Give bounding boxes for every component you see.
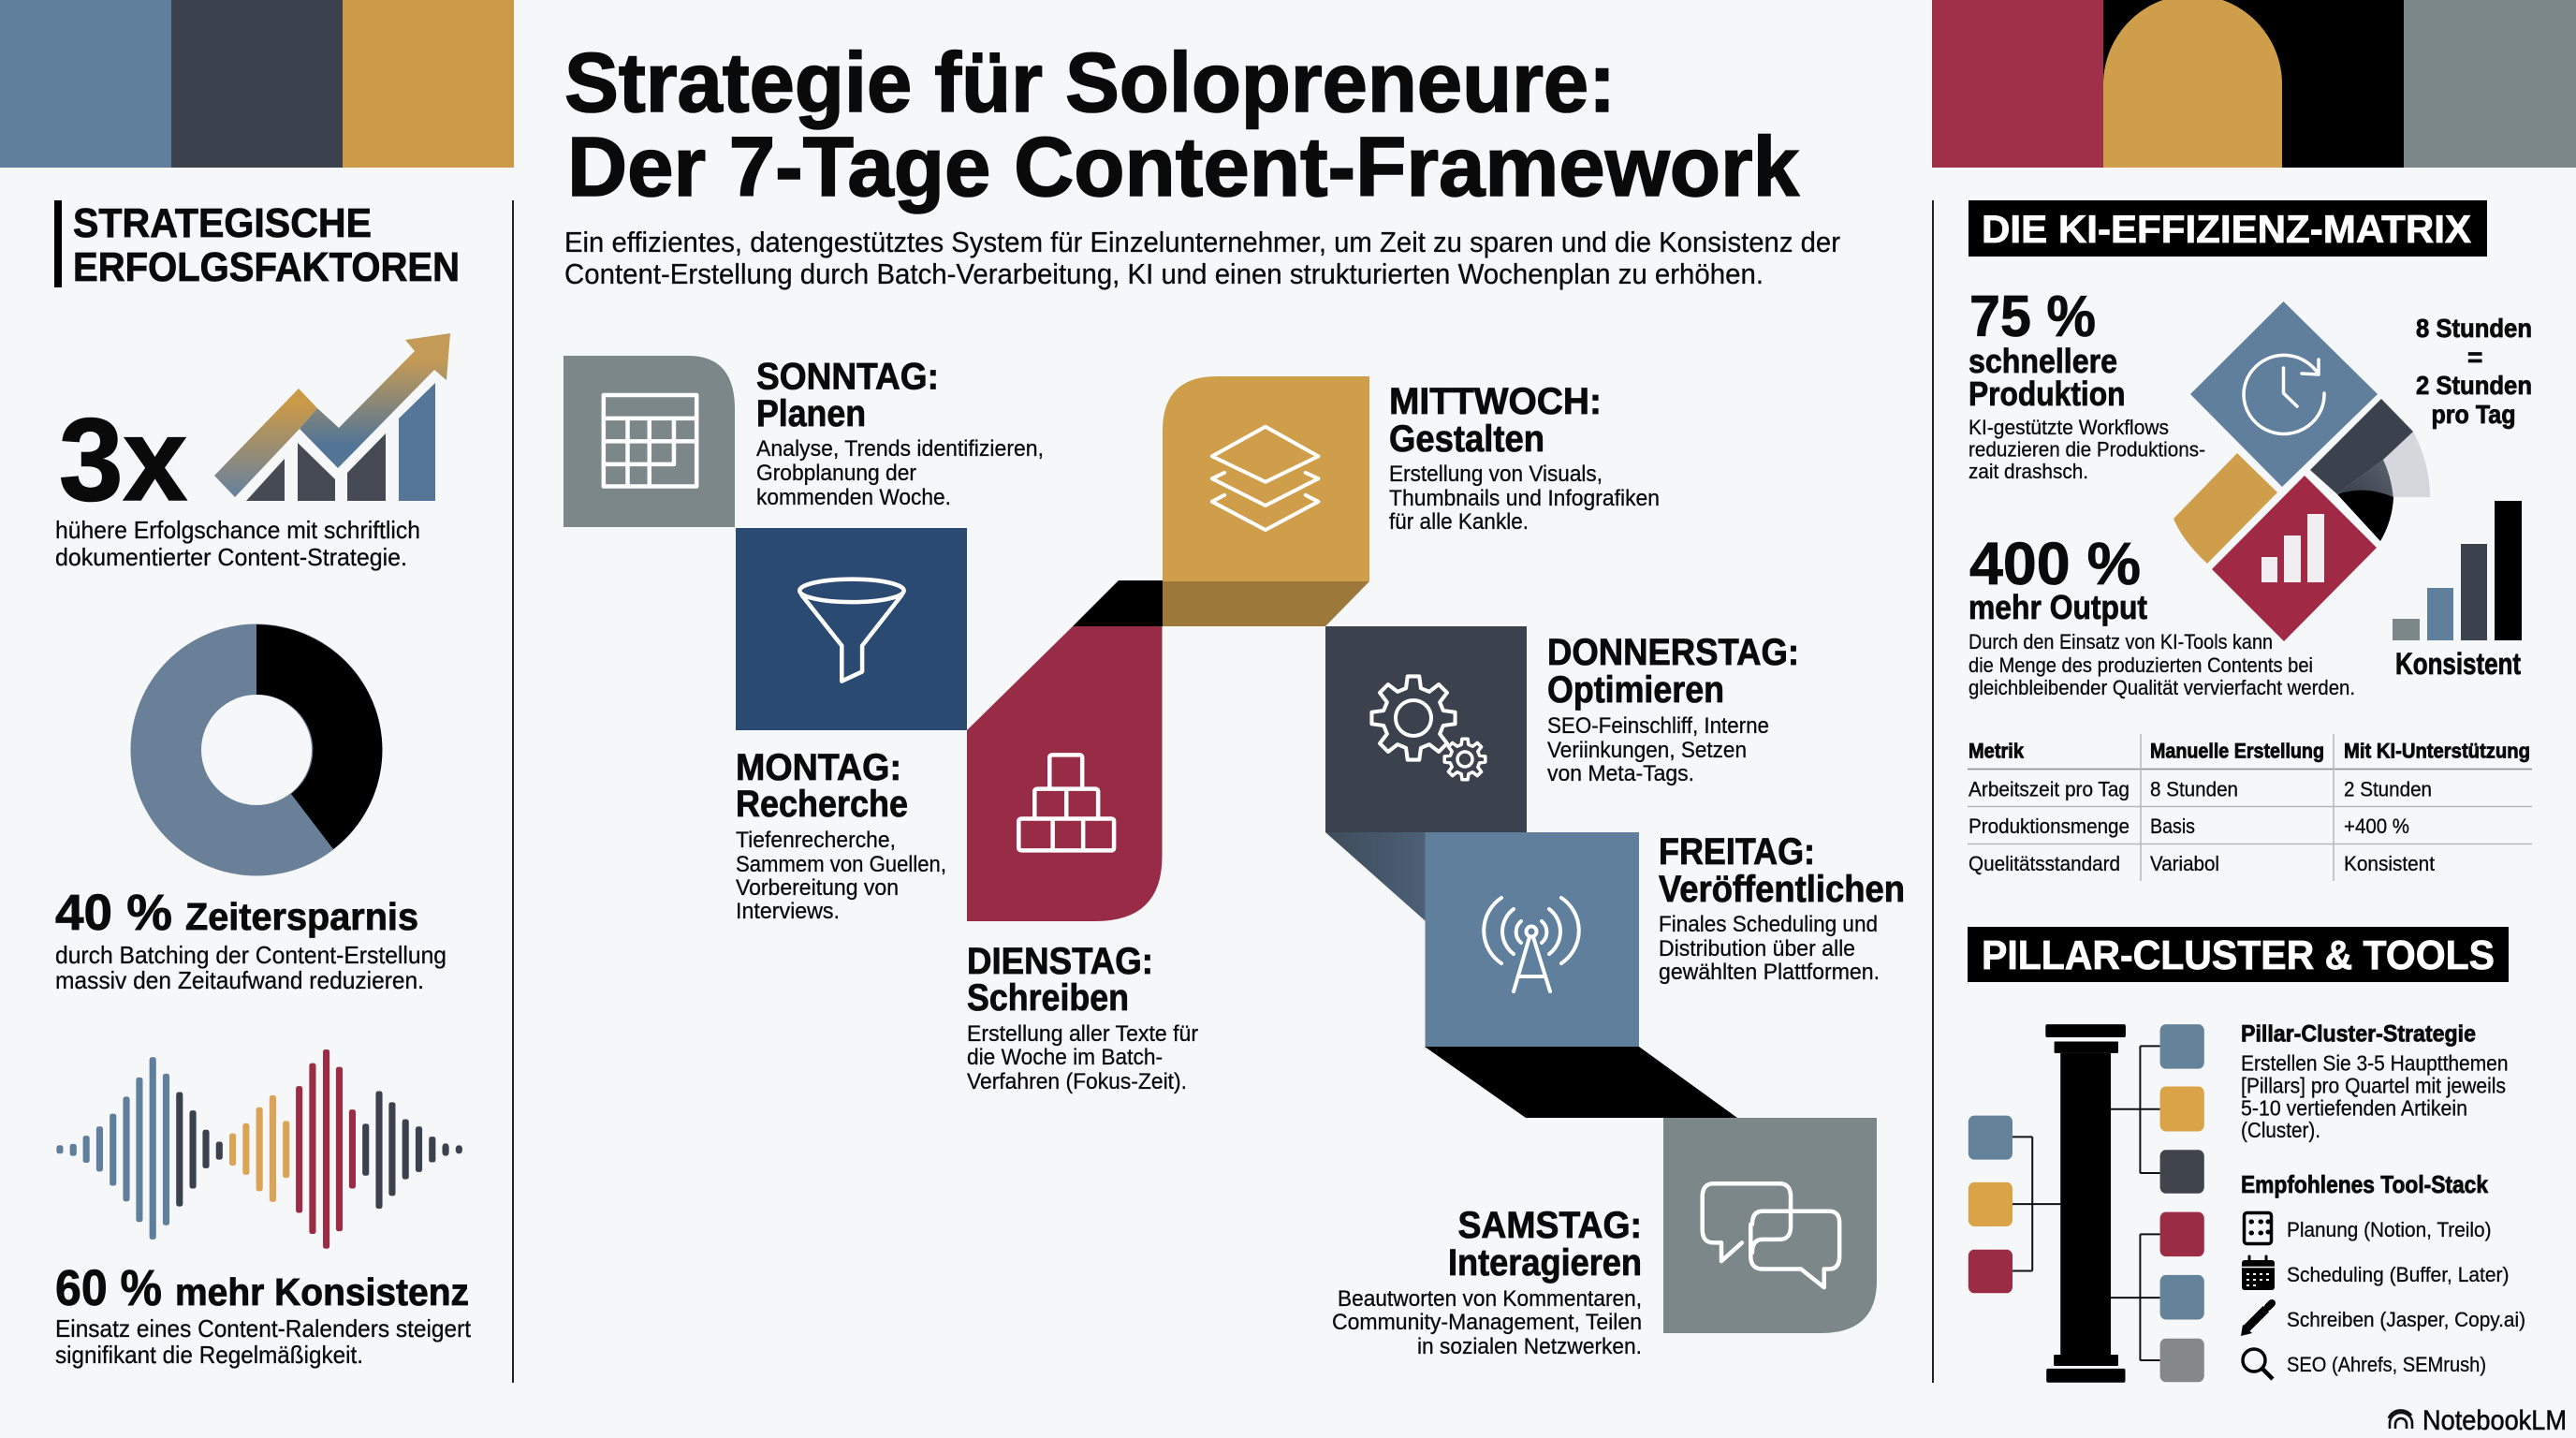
stat: 60 percent consistency: 60 % [55, 1260, 162, 1316]
icon: calendar grid [604, 395, 696, 487]
text: mittwoch [1389, 381, 1660, 535]
stat: 60 percent consistency: mehr Konsistenz [175, 1270, 469, 1313]
text: donnerstag: von Meta-Tags. [1547, 761, 1694, 786]
text: sonntag: Grobplanung der [756, 461, 916, 486]
heading: pillar-cluster & tools: PILLAR-CLUSTER & TOOLS [1982, 932, 2495, 978]
stat: 400 percent: 400 % [1969, 530, 2141, 597]
text: 3x caption [55, 516, 420, 571]
heading: die ki-effizienz-matrix: DIE KI-EFFIZIENZ-MATRIX [1982, 207, 2471, 251]
title: Der 7-Tage Content-Framework [567, 121, 1800, 214]
stat: 400 percent: gleichbleibender Qualität vervierfacht werden. [1969, 676, 2355, 699]
table: comparison: Quelitätsstandard [1969, 852, 2120, 875]
text: dienstag [967, 941, 1198, 1094]
table: comparison: Arbeitszeit pro Tag [1969, 777, 2130, 801]
table: comparison: 2 Stunden [2344, 777, 2432, 801]
chart: waveform [56, 1049, 462, 1249]
text: freitag: Finales Scheduling und [1659, 912, 1878, 937]
stat: 60 percent consistency [55, 1260, 472, 1369]
icon: calendar [2242, 1256, 2275, 1290]
icon: chat bubbles [1703, 1183, 1839, 1287]
table: comparison: Manuelle Erstellung [2150, 740, 2324, 762]
text: donnerstag: DONNERSTAG: [1547, 632, 1799, 673]
stat: 400 percent: Durch den Einsatz von KI-Tools kann [1969, 630, 2273, 653]
heading: strategische erfolgsfaktoren [54, 200, 460, 290]
table: comparison: +400 % [2344, 814, 2409, 838]
stat: 75 percent: KI-gestützte Workflows [1969, 416, 2169, 439]
connector: black band [1073, 580, 1163, 626]
text: pillar-cluster strategy: Pillar-Cluster-Strategie [2241, 1020, 2476, 1047]
text: donnerstag: Veriinkungen, Setzen [1547, 738, 1747, 763]
heading: strategische erfolgsfaktoren: ERFOLGSFAKTOREN [73, 244, 460, 290]
text: 8 hours equals 2 hours: pro Tag [2432, 400, 2516, 429]
table: comparison: 8 Stunden [2150, 777, 2238, 801]
text: pillar-cluster strategy [2241, 1020, 2509, 1142]
text: dienstag: Erstellung aller Texte für [967, 1021, 1198, 1047]
stat: 75 percent: 75 % [1969, 285, 2096, 349]
text: donnerstag [1547, 632, 1799, 786]
text: montag: Sammem von Guellen, [736, 852, 946, 877]
stat: 60 percent consistency: Einsatz eines Content-Ralenders steigert [55, 1314, 472, 1343]
step shape: donnerstag [1325, 626, 1527, 832]
text: pillar-cluster strategy: 5-10 vertiefenden Artikein [2241, 1095, 2467, 1120]
text: seo: SEO (Ahrefs, SEMrush) [2287, 1353, 2486, 1376]
text: samstag [1332, 1205, 1642, 1359]
text: pillar-cluster strategy: Erstellen Sie 3-5 Hauptthemen [2241, 1050, 2509, 1075]
text: mittwoch: Gestalten [1389, 418, 1544, 460]
text: 8 hours equals 2 hours [2416, 314, 2532, 429]
stat: 400 percent: mehr Output [1969, 588, 2147, 626]
text: samstag: SAMSTAG: [1458, 1205, 1642, 1246]
text: 8 hours equals 2 hours: 8 Stunden [2416, 314, 2532, 343]
chart: efficiency diamonds [2174, 301, 2430, 641]
table: comparison: Produktionsmenge [1969, 814, 2130, 838]
chart: ascending bars [2393, 501, 2522, 640]
panel: KI efficiency matrix [1968, 200, 2532, 881]
stat: 40 percent time saving: Zeitersparnis [185, 895, 418, 938]
text: freitag [1659, 831, 1905, 985]
text: montag: Tiefenrecherche, [736, 828, 896, 853]
icon: layers [1212, 427, 1318, 530]
text: planung: Planung (Notion, Treilo) [2287, 1218, 2492, 1241]
text: samstag: Beautworten von Kommentaren, [1338, 1286, 1642, 1312]
text: samstag: Community-Management, Teilen [1332, 1310, 1642, 1335]
text: sonntag: SONNTAG: [756, 356, 939, 397]
stat: 40 percent time saving [55, 885, 446, 994]
stat: 75 percent: schnellere [1969, 342, 2117, 380]
text: dienstag: Verfahren (Fokus-Zeit). [967, 1069, 1187, 1094]
text: 8 hours equals 2 hours: = [2467, 343, 2482, 372]
connector: gold shadow band [1163, 581, 1369, 626]
table: comparison: Mit KI-Unterstützung [2344, 740, 2530, 762]
step shape: sonntag [564, 356, 735, 527]
text: mittwoch: Thumbnails und Infografiken [1389, 486, 1660, 511]
text: sonntag: Planen [756, 393, 866, 434]
stat: 3x: 3x [59, 395, 187, 525]
stat: 400 percent: die Menge des produzierten Contents bei [1969, 653, 2313, 677]
text: dienstag: Schreiben [967, 977, 1129, 1019]
text: montag: Vorbereitung von [736, 875, 899, 901]
stat: 40 percent time saving: 40 % [55, 885, 172, 941]
table: comparison: Basis [2150, 814, 2195, 838]
step shape: samstag [1663, 1118, 1877, 1333]
top left colour blocks [0, 0, 514, 168]
icon: stacked blocks [1018, 755, 1114, 850]
text: sonntag: Analyse, Trends identifizieren, [756, 436, 1044, 462]
icon: gears [1371, 676, 1486, 780]
text: 8 hours equals 2 hours: 2 Stunden [2416, 371, 2532, 400]
text: schreiben: Schreiben (Jasper, Copy.ai) [2287, 1308, 2525, 1331]
step shape: dienstag [967, 626, 1163, 921]
text: mittwoch: Erstellung von Visuals, [1389, 462, 1603, 487]
text: 3x caption: hühere Erfolgschance mit schriftlich [55, 516, 420, 544]
stat: 60 percent consistency: signifikant die Regelmäßigkeit. [55, 1341, 363, 1369]
text: freitag: Veröffentlichen [1659, 869, 1905, 910]
label: konsistent: Konsistent [2395, 647, 2521, 681]
text: freitag: FREITAG: [1659, 831, 1815, 873]
icon: pencil [2241, 1303, 2272, 1336]
table: comparison [1968, 734, 2532, 881]
text: montag: Recherche [736, 784, 908, 825]
subtitle [564, 226, 1840, 290]
column divider right [1932, 200, 1934, 1383]
panel: pillar cluster and tools [1968, 927, 2525, 1383]
step shape: montag [736, 528, 967, 730]
stat: 40 percent time saving: massiv den Zeitaufwand reduzieren. [55, 966, 424, 994]
text: samstag: in sozialen Netzwerken. [1417, 1334, 1642, 1359]
panel: strategic success factors [54, 200, 472, 1369]
text: dienstag: DIENSTAG: [967, 941, 1153, 982]
text: sonntag: kommenden Woche. [756, 485, 951, 510]
heading: strategische erfolgsfaktoren: STRATEGISCHE [73, 200, 372, 246]
subtitle: Ein effizientes, datengestütztes System für Einzelunternehmer, um Zeit zu sparen und die Konsistenz der [564, 226, 1840, 258]
text: 3x caption: dokumentierter Content-Strategie. [55, 543, 407, 571]
stat: 75 percent: reduzieren die Produktions- [1969, 438, 2205, 461]
chart: donut 40 percent [131, 624, 382, 876]
table: comparison: Konsistent [2344, 852, 2435, 875]
step shape: freitag [1425, 832, 1639, 1047]
stat: 400 percent [1969, 530, 2355, 699]
icon: clock [2244, 355, 2324, 433]
text: samstag: Interagieren [1448, 1242, 1642, 1284]
text: dienstag: die Woche im Batch- [967, 1045, 1163, 1070]
text: donnerstag: SEO-Feinschliff, Interne [1547, 713, 1769, 739]
text: scheduling: Scheduling (Buffer, Later) [2287, 1263, 2509, 1286]
icon: rising arrow chart [214, 333, 450, 501]
top right colour blocks with arch [1932, 0, 2576, 168]
text: donnerstag: Optimieren [1547, 669, 1724, 711]
table: comparison: Metrik [1969, 740, 2025, 762]
text: freitag: gewählten Plattformen. [1659, 960, 1880, 985]
panel: weekly staircase shapes [564, 356, 1877, 1333]
icon: funnel [799, 580, 904, 682]
icon: magnifier [2243, 1349, 2273, 1379]
connector: slate shadow [1325, 832, 1426, 921]
stat: 40 percent time saving: durch Batching der Content-Erstellung [55, 941, 446, 969]
text: mittwoch: MITTWOCH: [1389, 381, 1602, 422]
text: montag: MONTAG: [736, 747, 901, 788]
text: montag: Interviews. [736, 899, 840, 924]
text: freitag: Distribution über alle [1659, 936, 1855, 961]
text: mittwoch: für alle Kankle. [1389, 509, 1529, 535]
icon: planning board [2245, 1213, 2271, 1243]
icon: antenna [1484, 898, 1579, 991]
subtitle: Content-Erstellung durch Batch-Verarbeitung, KI und einen strukturierten Wochenplan zu erhöhen. [564, 257, 1764, 290]
diagram: pillar with cluster squares [1969, 1024, 2204, 1383]
column divider left [512, 200, 514, 1383]
stat: 75 percent: Produktion [1969, 374, 2125, 413]
title: Strategie für Solopreneure: [564, 37, 1616, 130]
text: montag [736, 747, 946, 924]
text: sonntag [756, 356, 1044, 510]
title [564, 37, 1800, 214]
stat: 75 percent: zait drashsch. [1969, 460, 2088, 483]
step shape: mittwoch [1163, 376, 1369, 581]
text: pillar-cluster strategy: [Pillars] pro Quartel mit jeweils [2241, 1073, 2506, 1097]
connector: black shadow [1425, 1047, 1737, 1118]
stat: 75 percent [1969, 285, 2205, 483]
text: pillar-cluster strategy: (Cluster). [2241, 1118, 2320, 1142]
table: comparison: Variabol [2150, 852, 2219, 875]
text: tool stack heading: Empfohlenes Tool-Stack [2241, 1170, 2488, 1198]
